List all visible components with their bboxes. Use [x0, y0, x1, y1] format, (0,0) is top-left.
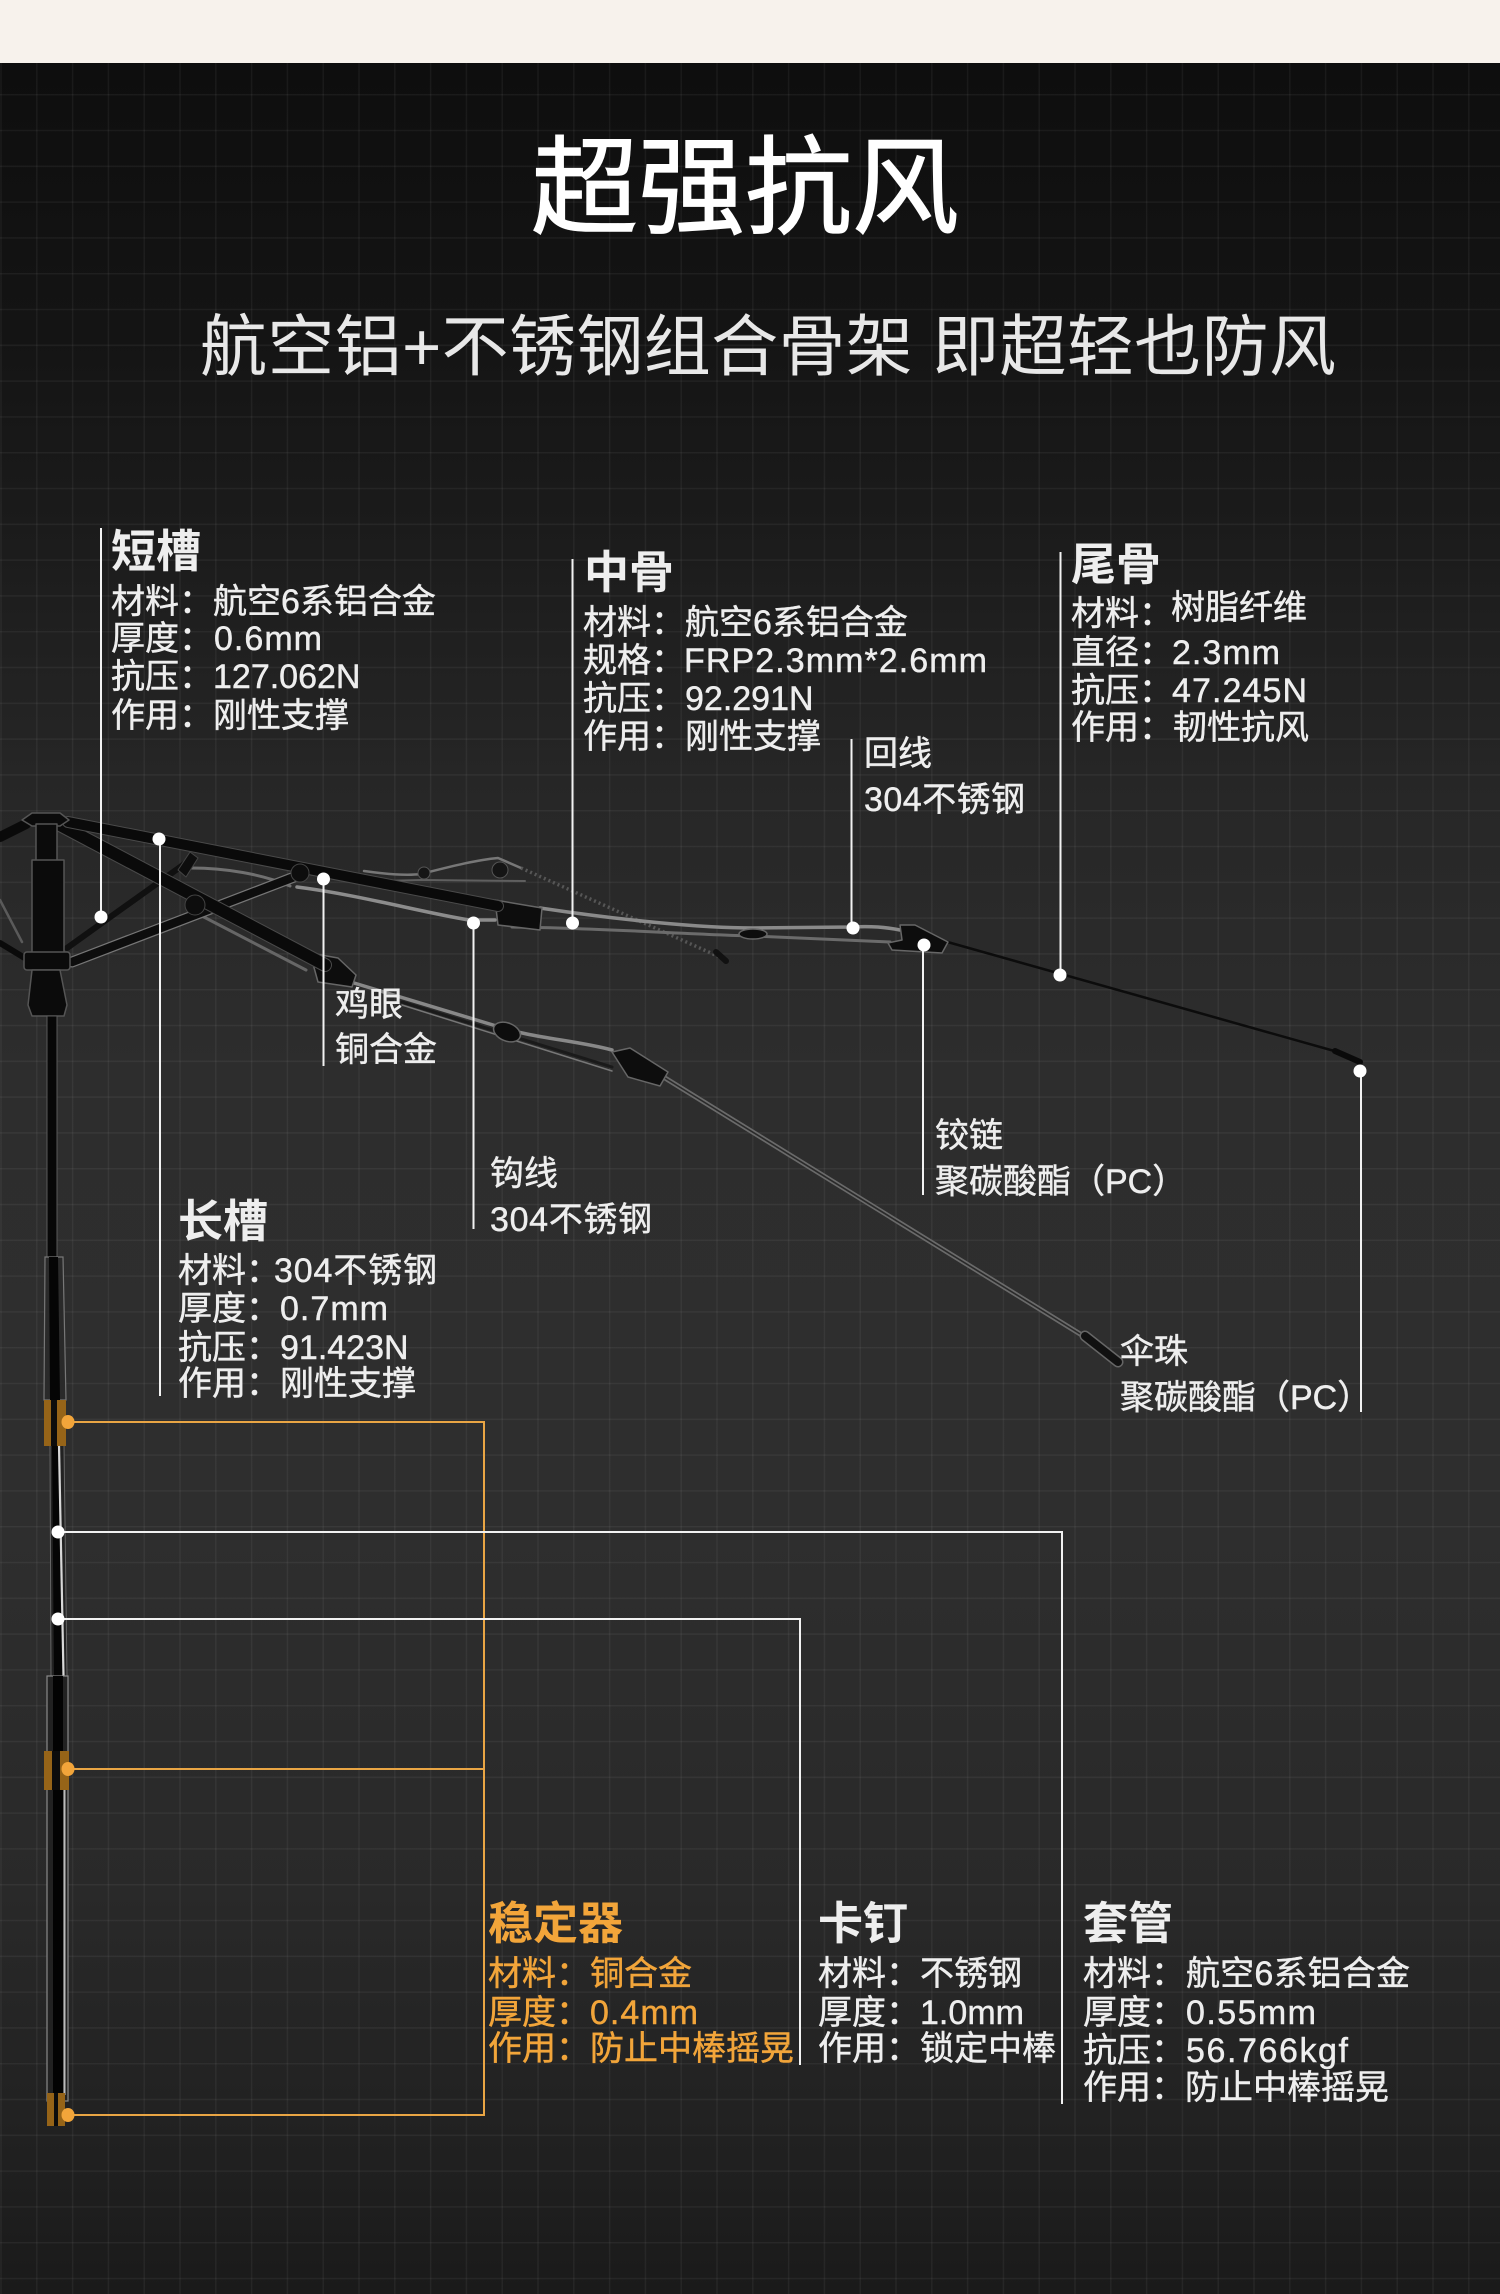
label: 回线: [864, 735, 1025, 819]
label: 鸡眼: 鸡眼: [335, 986, 403, 1024]
label: 尾骨: 抗压：: [1071, 672, 1173, 710]
label: 回线: 304不锈钢: [864, 781, 1025, 819]
label: 套管: [1083, 1898, 1410, 2107]
label: 卡钉: 1.0mm: [920, 1994, 1024, 2032]
label: 尾骨: 尾骨: [1071, 539, 1161, 590]
central joints on ribs: [178, 852, 309, 915]
label: 伞珠: 伞珠: [1120, 1333, 1188, 1371]
long lower rib with bead: [665, 1078, 1118, 1362]
label: 卡钉: 作用：锁定中棒: [818, 2030, 1056, 2068]
shaft middle section: [44, 1257, 66, 1400]
label: 卡钉: 厚度：: [818, 1994, 920, 2032]
label: 铰链: 铰链: [935, 1117, 1003, 1155]
label: 长槽: 抗压：: [178, 1329, 280, 1367]
label: 尾骨: 作用：韧性抗风: [1071, 709, 1309, 747]
label: 回线: 回线: [864, 735, 932, 773]
label: 长槽: 304不锈钢: [274, 1252, 437, 1290]
label: 套管: 厚度：: [1083, 1994, 1185, 2032]
umbrella shaft: [44, 1016, 69, 2126]
label: 伞珠: 聚碳酸酯（PC）: [1120, 1379, 1371, 1417]
label: 短槽: 材料：航空6系铝合金: [111, 583, 436, 621]
label: 尾骨: 47.245N: [1172, 672, 1307, 710]
label: 短槽: 0.6mm: [214, 620, 322, 658]
main top rib: [68, 822, 498, 906]
title: 超强抗风: [531, 128, 959, 248]
label: 伞珠: [1120, 1333, 1371, 1417]
outer double rib to hinge: [191, 868, 900, 1071]
label: 套管: 材料：: [1083, 1955, 1185, 1993]
short strut: [67, 860, 190, 948]
label: 稳定器: 材料：铜合金: [488, 1955, 692, 1993]
sleeve dark gaps: [51, 1400, 60, 2126]
tail rib: [944, 941, 1360, 1062]
label: 稳定器: 作用：防止中棒摇晃: [488, 2030, 794, 2068]
label: 尾骨: 直径：: [1071, 634, 1173, 672]
label: 短槽: 短槽: [111, 526, 201, 577]
label: 铰链: [935, 1117, 1186, 1201]
brass stabilizer sleeves: [44, 1400, 69, 2126]
label: 中骨: FRP2.3mm*2.6mm: [684, 642, 987, 680]
label: 中骨: 作用：刚性支撑: [583, 718, 821, 756]
label: 稳定器: 0.4mm: [590, 1994, 698, 2032]
label: 长槽: 刚性支撑: [280, 1365, 416, 1403]
shaft middle core: [49, 1257, 60, 1400]
label: 中骨: [583, 547, 987, 756]
label: 钩线: 钩线: [490, 1155, 558, 1193]
label: 钩线: [490, 1155, 652, 1239]
umbrella frame illustration: [0, 813, 1360, 1362]
label: 尾骨: 树脂纤维: [1171, 589, 1307, 627]
upper thin ribs: [364, 858, 726, 961]
label: 长槽: 91.423N: [280, 1329, 409, 1367]
hinges and joints: [310, 900, 948, 1086]
label: 长槽: 厚度：: [178, 1290, 280, 1328]
label: 套管: 作用：防止中棒摇晃: [1083, 2069, 1389, 2107]
shaft lower section: [47, 1676, 68, 2101]
label: 尾骨: 材料：: [1071, 595, 1173, 633]
middle strut: [72, 874, 302, 962]
label: 卡钉: 材料：不锈钢: [818, 1955, 1022, 1993]
label: 短槽: 厚度：: [111, 620, 213, 658]
label: 中骨: 材料：航空6系铝合金: [583, 604, 908, 642]
label: 短槽: 抗压：127.062N: [111, 658, 360, 696]
shaft tapered core: [52, 1445, 63, 1676]
label: 稳定器: 稳定器: [488, 1898, 623, 1949]
label: 卡钉: 卡钉: [818, 1898, 908, 1949]
label: 长槽: [178, 1196, 437, 1403]
label: 短槽: [111, 526, 436, 735]
stretcher thick rib: [60, 825, 325, 965]
shaft upper thin section: [47, 1016, 57, 1257]
label: 卡钉: [818, 1898, 1056, 2068]
label: 尾骨: 2.3mm: [1172, 634, 1280, 672]
label: 鸡眼: 铜合金: [335, 1031, 437, 1069]
leader lines: white callouts: [58, 528, 1361, 2104]
label: 鸡眼: [335, 986, 437, 1069]
top cream band: [0, 0, 1500, 63]
label: 钩线: 304不锈钢: [490, 1201, 652, 1239]
label: 尾骨: [1071, 539, 1309, 747]
shaft lower core: [53, 1676, 63, 2101]
shaft tapered section: [50, 1445, 67, 1676]
label: 铰链: 聚碳酸酯（PC）: [935, 1163, 1186, 1201]
label: 套管: 抗压：: [1083, 2032, 1185, 2070]
leader lines: stabilizer (orange): [62, 1415, 484, 2122]
label: 中骨: 规格：: [583, 642, 685, 680]
subtitle: 航空铝+不锈钢组合骨架 即超轻也防风: [200, 310, 1336, 385]
label: 短槽: 作用：刚性支撑: [111, 697, 349, 735]
left rib stubs: [0, 824, 28, 960]
label: 中骨: 中骨: [584, 547, 674, 598]
label: 套管: 航空6系铝合金: [1186, 1955, 1410, 1993]
hub and post: [22, 813, 70, 1016]
label: 长槽: 长槽: [178, 1196, 268, 1247]
leader dots: [52, 832, 1366, 1626]
label: 长槽: 材料：: [178, 1252, 280, 1290]
label: 中骨: 抗压：92.291N: [583, 680, 814, 718]
label: 长槽: 作用：: [178, 1365, 280, 1403]
label: 套管: 56.766kgf: [1186, 2032, 1349, 2070]
label: 长槽: 0.7mm: [280, 1290, 388, 1328]
label: 套管: 0.55mm: [1186, 1994, 1316, 2032]
label: 套管: 套管: [1083, 1898, 1173, 1949]
label: 稳定器: 厚度：: [488, 1994, 590, 2032]
label: 稳定器: [488, 1898, 794, 2068]
